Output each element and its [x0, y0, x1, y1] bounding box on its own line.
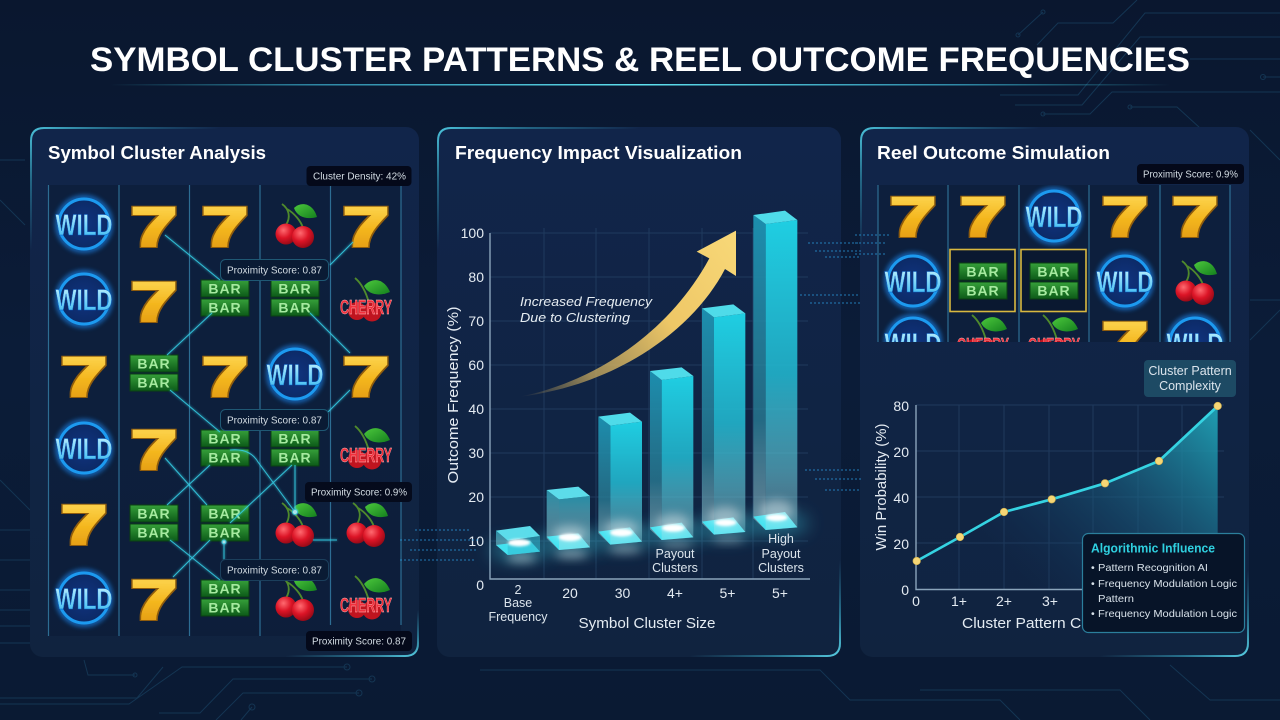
heading: reel outcome: Reel Outcome Simulation: [877, 143, 1110, 163]
icon: cherry: [346, 503, 388, 547]
icon: wild: [56, 422, 112, 474]
x axis labels: Payout: [656, 547, 695, 561]
x axis labels: High: [768, 532, 794, 546]
x ticks: [912, 593, 1058, 609]
icon: bar highlighted: [1021, 250, 1086, 312]
bars: [490, 211, 808, 562]
icon: wild: [266, 348, 324, 400]
icon: wild: WILD: [56, 583, 112, 616]
icon: cherry: [1176, 261, 1217, 305]
x axis labels: 30: [615, 585, 630, 601]
icon: bar: [271, 280, 319, 316]
x ticks: 3+: [1042, 593, 1058, 609]
area under line: [917, 406, 1218, 589]
bar 5: [695, 304, 755, 543]
y axis ticks: 100: [461, 225, 484, 241]
arrow caption: [520, 294, 654, 325]
panel: frequency impact visualization: [437, 127, 841, 657]
icon: cherry label: CHERRY: [1028, 335, 1080, 357]
trend arrow: [520, 231, 736, 397]
icon: bar: [201, 280, 249, 316]
callout: proximity score: [1137, 164, 1244, 184]
icon: wild: [1026, 190, 1082, 242]
x axis title: Cluster Pattern Clusters: [962, 615, 1127, 632]
data points: [913, 402, 1221, 565]
icon: cherry: [276, 503, 317, 547]
icon: bar: BAR: [278, 430, 312, 446]
y axis ticks: 40: [468, 401, 484, 417]
icon: wild: WILD: [884, 328, 942, 361]
cluster connection lines: [165, 235, 353, 580]
icon: wild: WILD: [56, 433, 112, 466]
icon: cherry label: CHERRY: [340, 297, 392, 319]
callout: proximity score: Proximity Score: 0.9%: [1143, 170, 1238, 180]
panel: reel outcome simulation: [860, 127, 1249, 657]
icon: bar highlighted: BAR: [966, 264, 1000, 280]
x axis title: Symbol Cluster Size: [578, 615, 716, 632]
x ticks: 1+: [951, 593, 967, 609]
x axis labels: 5+: [772, 585, 788, 601]
x axis labels: [488, 532, 804, 624]
icon: cherry label: [1028, 314, 1080, 342]
reel symbols grid: [56, 196, 392, 632]
icon: wild: WILD: [1096, 266, 1154, 299]
icon: wild: [1163, 311, 1227, 342]
x axis labels: 4+: [667, 585, 683, 601]
bar 6: [745, 211, 808, 533]
y axis ticks: 10: [468, 533, 484, 549]
callout: proximity score 3: Proximity Score: 0.9%: [311, 488, 407, 498]
heading: frequency impact: Frequency Impact Visualization: [455, 143, 742, 163]
icon: cherry label: CHERRY: [340, 595, 392, 617]
icon: wild: WILD: [266, 359, 324, 392]
icon: seven: 7: [131, 419, 177, 482]
x axis labels: 2: [515, 583, 522, 597]
icon: seven: 7: [202, 346, 248, 409]
icon: cherry: [276, 204, 317, 248]
y axis ticks: [461, 225, 484, 593]
heading: symbol cluster analysis: Symbol Cluster Analysis: [48, 143, 266, 163]
icon: wild: WILD: [1026, 201, 1082, 234]
panel: symbol cluster analysis: [30, 127, 419, 657]
legend items: Frequency Modulation Logic: [1098, 608, 1237, 620]
legend items: •: [1091, 608, 1095, 620]
icon: seven: 7: [1102, 186, 1148, 249]
y axis ticks: 60: [468, 357, 484, 373]
icon: wild: WILD: [884, 266, 942, 299]
x ticks: 2+: [996, 593, 1012, 609]
icon: cherry label: [340, 278, 392, 322]
icon: bar: BAR: [278, 300, 312, 316]
y ticks: [893, 398, 909, 598]
callout: cluster pattern complexity: Complexity: [1159, 379, 1222, 393]
callout: proximity score 4: Proximity Score: 0.87: [227, 566, 322, 576]
title: SYMBOL CLUSTER PATTERNS & REEL OUTCOME FREQUENCIES: [90, 41, 1190, 79]
arrow caption: Due to Clustering: [520, 310, 631, 325]
callout: cluster density: [306, 166, 412, 186]
callout: cluster pattern complexity: [1144, 360, 1236, 397]
bar 4: [643, 367, 703, 548]
y ticks: 0: [901, 582, 909, 598]
icon: bar: BAR: [208, 300, 242, 316]
x ticks: 0: [912, 593, 920, 609]
legend items: [1091, 562, 1237, 620]
icon: bar: BAR: [137, 374, 171, 390]
legend: algorithmic influence: [1082, 534, 1244, 632]
icon: seven: 7: [61, 346, 107, 409]
callout: proximity score 1: [220, 260, 328, 280]
trend line: [917, 406, 1218, 561]
reel outcome grid: [881, 185, 1227, 342]
y ticks: 80: [893, 398, 909, 414]
icon: seven: 7: [131, 569, 177, 632]
y ticks: 20: [893, 444, 909, 460]
icon: bar: BAR: [137, 506, 171, 522]
callout: proximity score 1: Proximity Score: 0.87: [227, 266, 322, 276]
y axis ticks: 70: [468, 313, 484, 329]
icon: bar: [201, 505, 249, 541]
line chart: win probability: [873, 398, 1224, 632]
y ticks: 40: [893, 490, 909, 506]
icon: bar highlighted: BAR: [966, 282, 1000, 298]
callout: proximity score 5: [306, 631, 412, 651]
x axis labels: Clusters: [758, 561, 804, 575]
icon: bar: BAR: [208, 506, 242, 522]
legend items: Pattern Recognition AI: [1098, 562, 1208, 574]
icon: cherry label: CHERRY: [957, 335, 1009, 357]
x axis labels: Base: [504, 596, 532, 610]
icon: cherry label: [958, 314, 1009, 342]
icon: bar: BAR: [278, 450, 312, 466]
x axis labels: Payout: [762, 547, 801, 561]
y axis ticks: 80: [468, 269, 484, 285]
icon: bar highlighted: BAR: [1037, 264, 1071, 280]
arrow caption: Increased Frequency: [520, 294, 654, 309]
icon: seven: 7: [1102, 311, 1148, 374]
y axis label: Outcome Frequency (%): [445, 306, 462, 483]
icon: seven: 7: [343, 196, 389, 259]
icon: bar: BAR: [208, 280, 242, 296]
icon: seven: 7: [960, 186, 1006, 249]
icon: wild: [1096, 255, 1154, 307]
icon: cherry label: [340, 576, 392, 620]
bar chart: outcome frequency: [445, 211, 810, 632]
icon: bar: BAR: [137, 524, 171, 540]
icon: wild: [56, 273, 112, 325]
icon: bar: BAR: [208, 430, 242, 446]
x axis labels: Frequency: [488, 610, 548, 624]
bar 1: [490, 526, 547, 562]
icon: seven: 7: [131, 196, 177, 259]
icon: bar highlighted: [950, 250, 1015, 312]
y axis ticks: 30: [468, 445, 484, 461]
y axis label: Win Probability (%): [873, 423, 890, 550]
icon: bar: BAR: [208, 600, 242, 616]
icon: seven: 7: [202, 196, 248, 259]
icon: bar: BAR: [208, 450, 242, 466]
icon: bar: [201, 430, 249, 466]
icon: bar highlighted: BAR: [1037, 282, 1071, 298]
icon: cherry label: CHERRY: [340, 445, 392, 467]
legend items: Pattern: [1098, 593, 1134, 605]
bar 3: [592, 413, 652, 553]
x axis labels: 20: [562, 585, 578, 601]
x axis labels: 5+: [720, 585, 735, 601]
icon: wild: [881, 311, 945, 342]
icon: wild: [884, 255, 942, 307]
icon: bar: BAR: [278, 280, 312, 296]
legend items: Frequency Modulation Logic: [1098, 578, 1237, 590]
callout: proximity score 5: Proximity Score: 0.87: [312, 636, 406, 648]
icon: bar: [130, 505, 178, 541]
icon: seven: 7: [1172, 186, 1218, 249]
icon: bar: [271, 430, 319, 466]
icon: seven: 7: [131, 271, 177, 334]
legend items: •: [1091, 562, 1095, 574]
callout: cluster pattern complexity: Cluster Pattern: [1148, 364, 1232, 378]
callout: proximity score 4: [220, 560, 328, 580]
icon: wild: [56, 572, 112, 624]
icon: seven: 7: [890, 186, 936, 249]
icon: cherry label: [340, 426, 392, 470]
icon: bar: BAR: [208, 580, 242, 596]
y axis ticks: 0: [476, 577, 484, 593]
legend title: Algorithmic Influence: [1091, 542, 1215, 556]
icon: wild: WILD: [56, 284, 112, 317]
callout: proximity score 2: Proximity Score: 0.87: [227, 416, 322, 426]
callout: proximity score 2: [220, 410, 328, 430]
y axis ticks: 20: [468, 489, 484, 505]
icon: bar: [130, 355, 178, 391]
icon: bar: BAR: [208, 524, 242, 540]
callout: proximity score 3: [305, 482, 412, 502]
icon: seven: 7: [343, 346, 389, 409]
icon: bar: BAR: [137, 356, 171, 372]
icon: seven: 7: [61, 494, 107, 557]
y ticks: 20: [893, 536, 909, 552]
icon: wild: [56, 198, 112, 250]
bar 2: [540, 487, 600, 558]
icon: bar: [201, 580, 249, 616]
icon: wild: WILD: [1166, 328, 1224, 361]
x axis labels: Clusters: [652, 561, 698, 575]
legend items: •: [1091, 578, 1095, 590]
icon: wild: WILD: [56, 209, 112, 242]
icon: cherry: [276, 577, 317, 621]
data streams between panels: [400, 235, 890, 560]
callout: cluster density: Cluster Density: 42%: [313, 172, 406, 182]
